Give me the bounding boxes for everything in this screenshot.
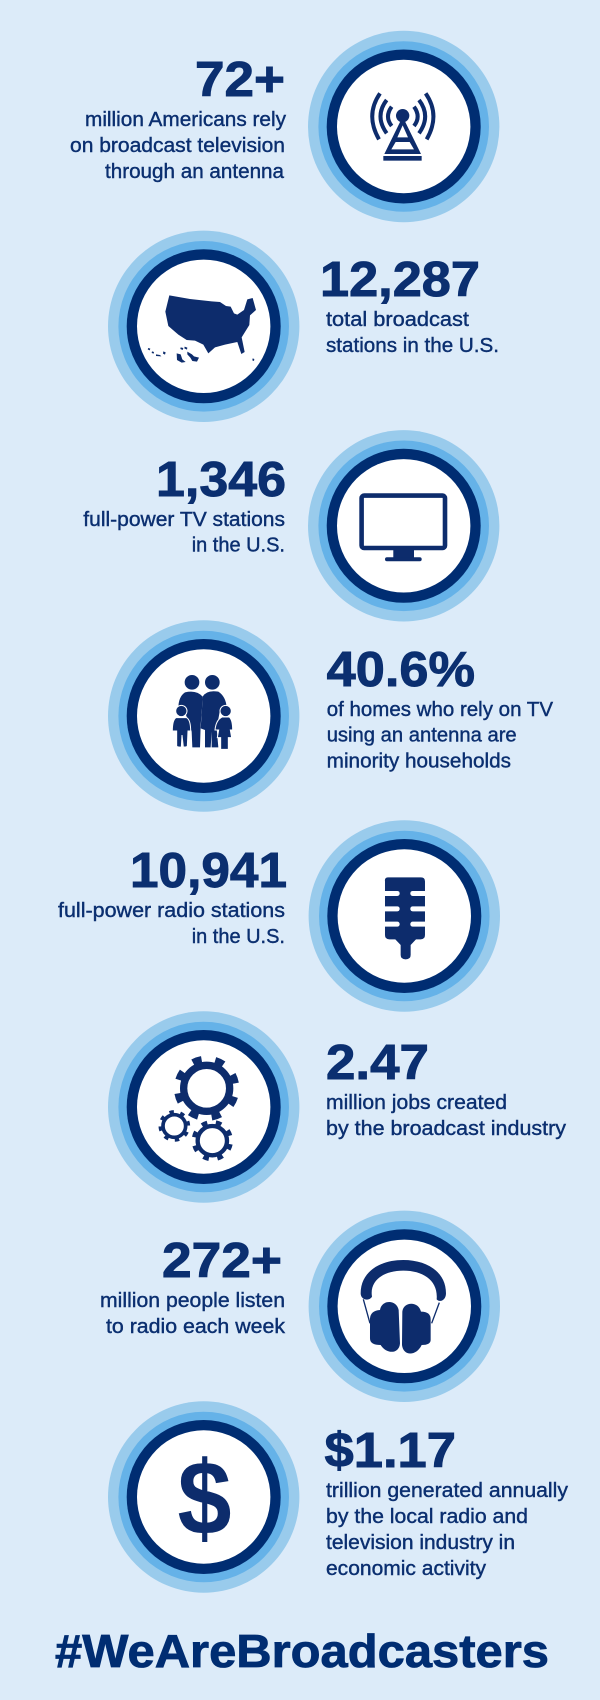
text: stations description: total broadcast [326, 308, 469, 331]
icon: United States map [148, 295, 256, 363]
icon ring: family [108, 620, 299, 812]
icon ring: map [108, 231, 299, 422]
number: 10,941: 10,941 [130, 844, 287, 898]
icon ring: television [308, 430, 499, 622]
text: households description [327, 698, 553, 772]
number: 272+: 272+ [162, 1234, 282, 1288]
text: jobs description: by the broadcast industry [326, 1117, 567, 1140]
icon: family [172, 675, 233, 749]
text: listeners description: to radio each week [106, 1315, 286, 1338]
text: listeners description [100, 1289, 286, 1338]
icon ring: antenna [308, 31, 499, 222]
text: households description: using an antenna are [327, 724, 517, 747]
number: 72+: 72+ [195, 53, 285, 107]
panel: $1.17 economic stat [108, 1401, 569, 1593]
icon: microphone [382, 877, 428, 959]
text: economic description: trillion generated annually [326, 1479, 569, 1502]
text: jobs description [326, 1091, 567, 1140]
panel: 12,287 stations stat [108, 231, 499, 422]
number: 40.6%: 40.6% [327, 643, 475, 697]
number: 12,287: 12,287 [320, 253, 480, 307]
text: TV description: in the U.S. [192, 534, 285, 556]
panel: 10,941 radio stat [58, 820, 500, 1012]
text: economic description: television industry in [326, 1531, 515, 1554]
icon: dollar sign: $ [178, 1440, 232, 1557]
text: listeners description: million people listen [100, 1289, 285, 1312]
text: households description: of homes who rely on TV [327, 698, 553, 721]
text: economic description [326, 1479, 569, 1580]
panel: 72+ antenna stat [70, 31, 499, 222]
icon: television [362, 496, 445, 561]
icon ring: headphones [309, 1211, 500, 1402]
text: antenna description: on broadcast television [70, 134, 285, 157]
text: antenna description [70, 108, 287, 183]
text: economic description: by the local radio and [326, 1505, 528, 1528]
text: antenna description: through an antenna [105, 160, 285, 183]
text: stations description [326, 308, 499, 357]
panel: 2.47 jobs stat [108, 1011, 567, 1203]
icon ring: dollar [108, 1401, 299, 1593]
text: radio description: in the U.S. [192, 925, 285, 948]
icon: gears [156, 1052, 243, 1162]
text: TV description [83, 508, 285, 556]
number: 1,346: 1,346 [156, 453, 286, 507]
text: households description: minority households [327, 749, 511, 772]
icon: broadcast tower [372, 93, 433, 161]
icon: headphones [361, 1260, 446, 1353]
title: hashtag: #WeAreBroadcasters [55, 1625, 549, 1677]
panel: 272+ listeners stat [100, 1211, 500, 1402]
number: $1.17: $1.17 [324, 1424, 456, 1478]
panel: 1,346 TV stat [83, 430, 499, 622]
text: economic description: economic activity [326, 1557, 487, 1580]
text: radio description [58, 899, 285, 948]
number: 2.47: 2.47 [326, 1036, 429, 1090]
text: stations description: stations in the U.S. [326, 334, 499, 357]
icon ring: microphone [309, 820, 500, 1012]
panel: 40.6% households stat [108, 620, 553, 812]
text: antenna description: million Americans rely [85, 108, 287, 131]
text: radio description: full-power radio stations [58, 899, 285, 922]
icon ring: gears [108, 1011, 299, 1203]
text: TV description: full-power TV stations [83, 508, 285, 531]
text: jobs description: million jobs created [326, 1091, 507, 1114]
